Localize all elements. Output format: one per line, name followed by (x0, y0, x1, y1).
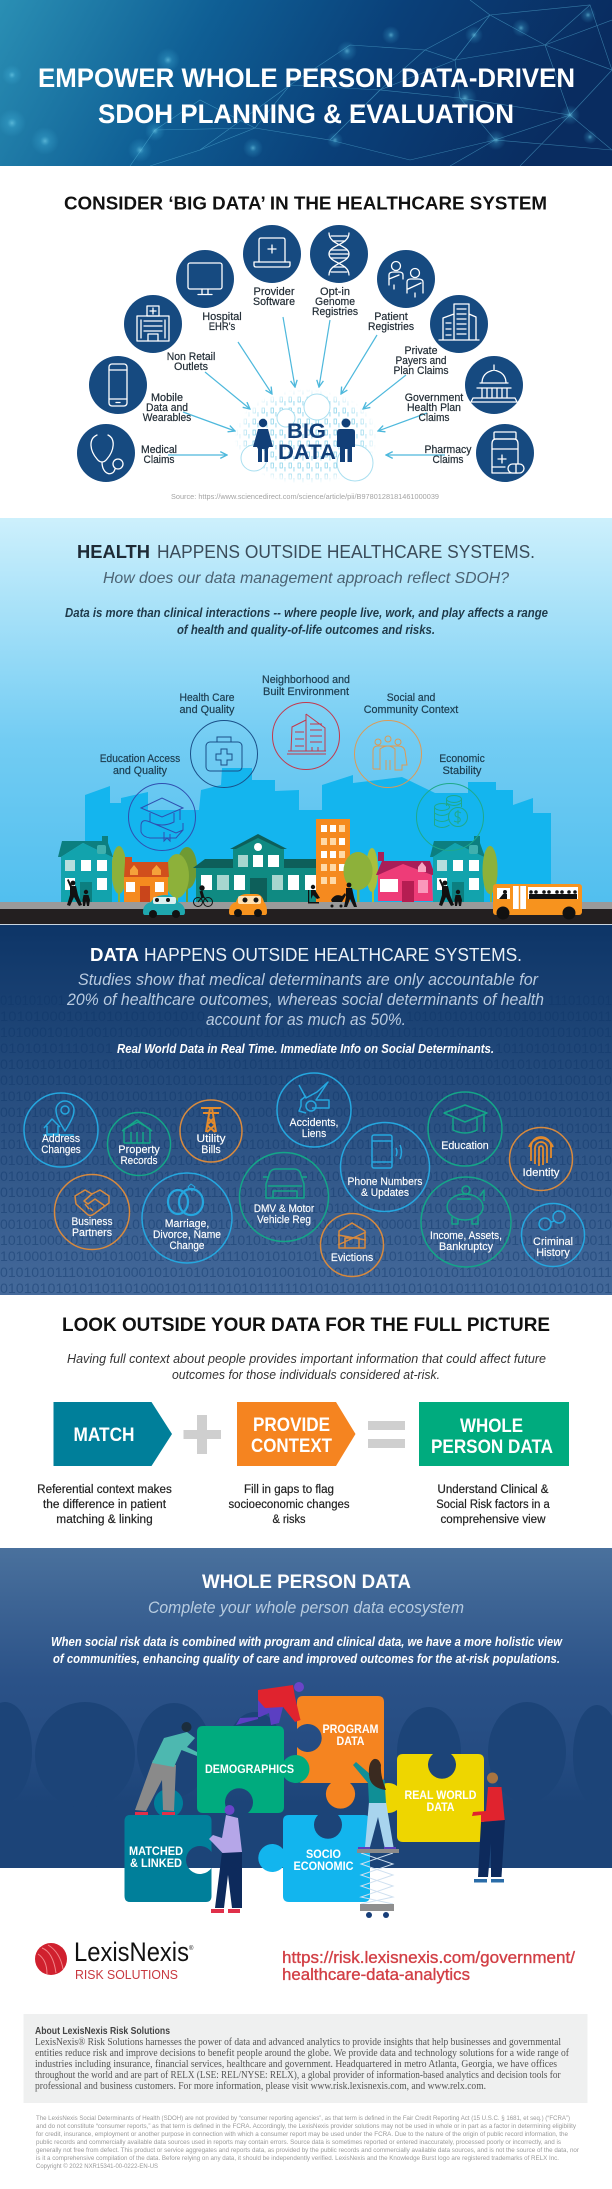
heading: data happens: DATA (90, 944, 139, 965)
about box: industries including insurance, financial services, healthcare and government. Headquartered in metro Atlanta, Georgia, we have offices (35, 2059, 557, 2070)
cyclist (194, 886, 212, 906)
caption: provide context: socioeconomic changes (228, 1499, 350, 1511)
source labels: Mobile (151, 392, 183, 404)
title: EMPOWER WHOLE PERSON DATA-DRIVEN (38, 63, 575, 93)
data source labels: Records (120, 1155, 158, 1167)
source labels: EHR's (209, 321, 236, 333)
icon: office buildings (439, 304, 479, 340)
source circles (77, 225, 534, 482)
source labels: Government (405, 392, 463, 404)
determinant labels: Economic (439, 753, 485, 765)
equals sign (368, 1421, 405, 1448)
determinant labels: Neighborhood and (262, 674, 350, 686)
caption: match: matching & linking (56, 1514, 153, 1526)
panel: header banner (0, 0, 612, 166)
intro text: outcomes for those individuals considered at-risk. (172, 1367, 440, 1382)
data source labels: History (536, 1247, 570, 1259)
heading: look outside: LOOK OUTSIDE YOUR DATA FOR THE FULL PICTURE (62, 1315, 550, 1336)
about box: About LexisNexis Risk Solutions (35, 2025, 170, 2037)
panel: health happens outside healthcare systems (0, 518, 612, 925)
binary background: 0010100010101001000010100100101010010101010000101010100101011010011101010101011 (0, 1104, 612, 1120)
icon: accident cars (299, 1082, 329, 1113)
legal disclaimer: generally not free from defect. This product or service aggregates and reports data, as provided by the public records and commercially available data sources, and is not the source of the data, nor (36, 2147, 580, 2154)
legal disclaimer: public records and commercially available data sources used in reports may contain errors. Source data is sometimes reported or entered inaccurately, processed poorly or incorrectly, and is (36, 2139, 562, 2146)
data source labels: Utility (196, 1133, 226, 1145)
intro text: of health and quality-of-life outcomes and risks. (177, 623, 435, 637)
puzzle piece: real world data: REAL WORLD (404, 1790, 476, 1802)
pink house (376, 852, 435, 902)
intro statistic text (66, 970, 544, 1029)
about box: professional and business customers. For more information, please visit www.risk.lexisnexis.com, and www.relx.com. (35, 2081, 486, 2092)
binary background: 0010100101010010101000010010101010101010100001010000010110101010101011010101010 (0, 1216, 612, 1232)
data source labels: Divorce, Name (153, 1229, 221, 1241)
arrow: provide context: PROVIDE (253, 1415, 330, 1436)
binary background: 0101010111010101000101010101010101010010101001010101010101011010101010101010111 (0, 1264, 612, 1280)
source labels: Provider (254, 286, 295, 298)
logo: LexisNexis Risk Solutions: LexisNexis (74, 1937, 189, 1967)
icon: neighborhood buildings (272, 702, 340, 770)
binary background: 0101010101011011010001010111010101111110101010101110101010101110101010101010101 (0, 1056, 612, 1072)
source labels: Health Plan (407, 402, 461, 414)
binary background: 1010101010101001010010101010101010101010101011010101010101010101010101010010011 (0, 1136, 612, 1152)
icon: smartphone (109, 364, 127, 406)
puzzle piece: demographics: DEMOGRAPHICS (205, 1764, 294, 1776)
puzzle piece: demographics (197, 1726, 309, 1813)
data source labels: Phone Numbers (348, 1176, 423, 1188)
box: whole person data (419, 1402, 569, 1466)
about box: entities reduce risk and improve decisions to benefit people around the globe. We provide data and technology solutions for a wide range of (35, 2048, 570, 2059)
data source labels: Criminal (533, 1236, 573, 1248)
scooter rider (308, 885, 320, 904)
puzzle piece: program data: PROGRAM (322, 1724, 378, 1736)
website link: healthcare-data-analytics (282, 1965, 470, 1984)
binary background (0, 992, 612, 1296)
big data graphic: BIG (287, 420, 326, 443)
icon: economic stability coins (416, 784, 484, 850)
teal car (143, 895, 185, 918)
about box: LexisNexis® Risk Solutions harnesses the power of data and advanced analytics to provide insights that help businesses and governmental (35, 2037, 561, 2048)
determinant labels: and Quality (180, 704, 235, 716)
icon: handcuffs (539, 1211, 565, 1230)
source labels: Medical (141, 444, 177, 456)
subtitle: Complete your whole person data ecosystem (148, 1599, 464, 1617)
source labels: Payers and (396, 355, 446, 367)
orange tower (316, 819, 350, 902)
panel: look outside your data (0, 1295, 612, 1548)
caption: provide context: Fill in gaps to flag (244, 1484, 334, 1496)
caption: match: Referential context makes (37, 1484, 172, 1496)
panel: big data in the healthcare system (64, 166, 546, 500)
binary background: 1010101010101010100111010101010010101010101001010010101010101010101010101010101 (0, 1088, 612, 1104)
source labels: Software (253, 296, 295, 308)
source labels: Claims (418, 412, 450, 424)
determinant labels: Community Context (364, 704, 458, 716)
icon: knowledge burst globe (35, 1943, 67, 1975)
icon: monitor (188, 263, 222, 294)
data source labels (41, 1117, 573, 1264)
icon: man (337, 418, 355, 462)
arrows into big data (168, 317, 445, 455)
icon: fingerprint (529, 1137, 553, 1166)
heading: consider big data: CONSIDER ‘BIG DATA’ IN THE HEALTHCARE SYSTEM (64, 194, 547, 214)
icon: pill bottle (492, 432, 524, 473)
source labels: Registries (312, 306, 358, 318)
puzzle piece: matched and linked: & LINKED (130, 1858, 182, 1870)
road (0, 902, 612, 925)
determinant labels: Education Access (100, 753, 181, 765)
data source labels: Change (170, 1240, 204, 1252)
source labels: Data and (146, 402, 188, 414)
caption: whole person data: Understand Clinical & (438, 1484, 549, 1496)
data source labels: Vehicle Reg (257, 1214, 311, 1226)
arrow: provide context: CONTEXT (251, 1436, 332, 1457)
intro text: of communities, enhancing quality of care and improved outcomes for the at-risk populations. (53, 1652, 560, 1666)
subtitle question: How does our data management approach reflect SDOH? (103, 570, 509, 587)
puzzle piece: socio economic (258, 1815, 370, 1902)
binary background: 101010101001010101001010011 (406, 1008, 612, 1024)
about box: throughout the world and are part of RELX (LSE: REL/NYSE: RELX), a global provider of information-based analytics and decision tools for (35, 2070, 561, 2081)
data source labels: Address (42, 1133, 80, 1145)
determinant labels: Social and (387, 692, 435, 704)
tree over tower (344, 852, 372, 890)
person: teal shirt pushing (135, 1722, 197, 1815)
icon: property house (122, 1120, 152, 1143)
source labels: Opt-in (320, 286, 350, 298)
source labels: Hospital (202, 311, 242, 323)
data source labels: Identity (522, 1167, 560, 1179)
heading: whole person data: WHOLE PERSON DATA (202, 1572, 411, 1593)
title: SDOH PLANNING & EVALUATION (98, 99, 514, 129)
icon: wedding rings (168, 1184, 203, 1215)
panel: whole person data (0, 1548, 612, 1930)
icon: education access (128, 784, 196, 850)
binary background: 0101010101011011010001010111010101111010101010101110101010101110101010101010101 (0, 1168, 612, 1184)
heading: health happens: HEALTH (77, 541, 150, 562)
determinant labels: Built Environment (263, 686, 349, 698)
icon: community people (354, 720, 422, 788)
determinant labels: Stability (442, 765, 482, 777)
intro text (67, 1351, 546, 1382)
puzzle piece: socio economic: ECONOMIC (294, 1861, 354, 1873)
caption: provide context: & risks (272, 1514, 306, 1526)
orange car (229, 894, 267, 917)
determinant labels: and Quality (113, 765, 167, 777)
data source icons (43, 1082, 565, 1248)
person: lilac shirt (209, 1805, 242, 1913)
orange house (124, 857, 169, 902)
source labels: Registries (368, 321, 414, 333)
determinant labels: Health Care (180, 692, 234, 704)
data source labels: Bills (201, 1144, 221, 1156)
intro statistic text: Studies show that medical determinants are only accountable for (78, 970, 539, 989)
icon: piggy bank (447, 1186, 484, 1224)
background crowd silhouettes (0, 1702, 612, 1808)
teal house left (58, 836, 113, 902)
binary background: 010101001 (0, 992, 65, 1008)
binary background: 1010100010111010101010010101111010101010101010101010101010101010101010101010011 (0, 1232, 612, 1248)
data source labels: Business (72, 1216, 113, 1228)
legal disclaimer: and do not constitute “consumer reports,” as that term is defined in the FCRA. Accordingly, the LexisNexis provider solutions may not be used in whole or in part as a factor in determining eligibility (36, 2123, 577, 2130)
arrow: match: MATCH (74, 1425, 134, 1446)
puzzle piece: socio economic: SOCIO (306, 1849, 341, 1861)
source labels: Patient (374, 311, 408, 323)
intro text: Having full context about people provides important information that could affect future (67, 1351, 546, 1366)
logo: LexisNexis Risk Solutions (35, 1937, 194, 1982)
data source circles (24, 1073, 584, 1276)
source labels: Plan Claims (394, 365, 449, 377)
icon: graduation cap (444, 1105, 487, 1133)
source labels: Claims (432, 454, 464, 466)
binary background: 1010001010100101001010101010111010101010101011010101011011010101010101010110011 (0, 1248, 612, 1264)
data source labels: Income, Assets, (430, 1230, 502, 1242)
binary background: 0101010111010101010101010101010101010101001010101001010101010110101010101011010 (0, 1152, 612, 1168)
arrow: provide context (237, 1402, 356, 1466)
intro text: Data is more than clinical interactions -- where people live, work, and play affects a range (65, 606, 548, 620)
caption: match (37, 1484, 172, 1526)
parent with stroller (330, 883, 357, 908)
binary background: 0101010101011011010001010111010101111110101010101110101010101110101010101010101 (0, 1280, 612, 1296)
pedestrians (67, 879, 462, 908)
icon: capitol (471, 365, 517, 402)
data source labels: Property (118, 1144, 160, 1156)
puzzle piece: program data: DATA (336, 1736, 364, 1748)
box: whole person data: WHOLE (460, 1416, 523, 1437)
source labels: Outlets (174, 361, 208, 373)
trees (112, 846, 498, 902)
binary background: 101101010101011 (495, 1040, 612, 1056)
icon: phone with signal (372, 1135, 402, 1168)
box: whole person data: PERSON DATA (431, 1437, 553, 1458)
binary background: 1010001010100101010010001010111010101010101010101011011010101101010101010101001 (0, 1024, 612, 1040)
panel: data happens outside healthcare systems (0, 925, 612, 1296)
binary background: 1010101011011010100101010111010101010101010101010101010101010101010101001010011 (0, 1120, 612, 1136)
data source labels: Marriage, (165, 1218, 209, 1230)
data source labels: & Updates (361, 1187, 409, 1199)
logo: LexisNexis Risk Solutions: RISK SOLUTIONS (75, 1968, 178, 1982)
intro text (51, 1635, 563, 1666)
caption: provide context (228, 1484, 350, 1526)
binary background: 1010100010110101010101010 (0, 1008, 205, 1024)
caption: whole person data: Social Risk factors in a (436, 1499, 550, 1511)
icon: woman (253, 419, 273, 462)
legal disclaimer: is it a comprehensive compilation of the data. Before relying on any data, it should be independently verified. LexisNexis and the Knowledge Burst logo are registered trademarks of RELX Inc. (36, 2155, 559, 2162)
icon: dna helix (329, 233, 349, 275)
person: on scissor lift (353, 1759, 399, 1918)
source labels (141, 286, 472, 466)
legal disclaimer: The LexisNexis Social Determinants of Health (SDOH) are not provided by “consumer reporting agencies”, as that term is defined in the Fair Credit Reporting Act (15 U.S.C. § 1681, et seq.) (“FCRA”) (36, 2115, 570, 2122)
intro statistic text: account for as much as 50%. (206, 1010, 406, 1029)
title (38, 63, 575, 129)
icon: eviction boarded house (338, 1223, 366, 1248)
caption: whole person data: comprehensive view (440, 1514, 546, 1526)
panel: data happens outside healthcare systems: HAPPENS OUTSIDE HEALTHCARE SYSTEMS. (144, 944, 522, 965)
icon: stethoscope (91, 435, 123, 474)
legal disclaimer: for credit, insurance, employment or another purpose in connection with which a consumer report may be used under the FCRA. Due to the nature of the origin of public record information, the (36, 2131, 568, 2138)
source labels: Pharmacy (424, 444, 472, 456)
determinant labels (100, 674, 485, 777)
school building (193, 834, 323, 902)
source labels: Claims (144, 454, 175, 466)
caption: match: the difference in patient (43, 1499, 167, 1511)
source labels: Non Retail (167, 351, 215, 363)
source labels: Genome (315, 296, 355, 308)
data source labels: Accidents, (290, 1117, 338, 1129)
icon: health care kit (190, 720, 258, 788)
tagline: Real World Data in Real Time. Immediate Info on Social Determinants. (117, 1042, 494, 1056)
data source labels: DMV & Motor (254, 1203, 315, 1215)
logo: LexisNexis Risk Solutions: ® (189, 1945, 194, 1952)
legal disclaimer (36, 2115, 580, 2170)
panel: footer (24, 1937, 588, 2170)
puzzle piece: matched and linked (124, 1789, 212, 1902)
intro text (65, 606, 548, 637)
icon: hospital (137, 306, 169, 341)
data source labels: Partners (72, 1227, 112, 1239)
big data graphic: DATA (278, 441, 336, 464)
website link (282, 1948, 575, 1984)
icon: car front (263, 1169, 307, 1198)
website link: https://risk.lexisnexis.com/government/ (282, 1948, 575, 1967)
icon: handshake (75, 1190, 109, 1216)
data source labels: Bankruptcy (439, 1241, 493, 1253)
data source labels: Education (441, 1140, 489, 1152)
icon: laptop (254, 238, 290, 267)
intro statistic text: 20% of healthcare outcomes, whereas social determinants of health (66, 990, 544, 1009)
city skyline (85, 768, 551, 910)
determinant circles and icons (128, 702, 484, 850)
caption: whole person data (436, 1484, 550, 1526)
puzzle piece: matched and linked: MATCHED (129, 1846, 183, 1858)
puzzle piece: real world data (373, 1754, 484, 1842)
icon: patients (389, 262, 423, 297)
person: red shirt standing (472, 1772, 505, 1882)
arrow: match (54, 1402, 172, 1466)
binary background: 0101010101010101010101010101111110101000011010101010010101101010101001011001010 (0, 1072, 612, 1088)
data source labels: Changes (41, 1144, 81, 1156)
binary background: 01010101110101 (0, 1040, 113, 1056)
panel: health happens outside healthcare systems: HAPPENS OUTSIDE HEALTHCARE SYSTEMS. (157, 541, 535, 562)
plus sign (184, 1415, 221, 1454)
icon: address pin (43, 1101, 74, 1135)
teal house right (430, 836, 485, 902)
data source labels: Liens (302, 1128, 327, 1140)
person: crawling on top (236, 1682, 304, 1725)
school bus (493, 884, 582, 920)
puzzle piece: program data (297, 1696, 384, 1809)
source citation: Source: https://www.sciencedirect.com/science/article/pii/B9780128181461000039 (171, 494, 439, 501)
binary background: 1010101010101010100101010101010100101010100101010101010101010101010101010101011 (0, 1200, 612, 1216)
source labels: Wearables (143, 412, 192, 424)
intro text: When social risk data is combined with program and clinical data, we have a more holistic view (51, 1635, 563, 1649)
big data graphic (236, 390, 376, 482)
tree right of house (482, 846, 498, 894)
legal disclaimer: Copyright © 2022 NXR15341-00-0222-EN-US (36, 2162, 158, 2170)
about box (24, 2014, 588, 2103)
data source labels: Evictions (331, 1252, 374, 1264)
binary background: 0101010101010101010101010111111010101111100101010010101010101010100101010010110 (0, 1184, 612, 1200)
icon: utility tower (201, 1108, 221, 1132)
source labels: Private (404, 345, 438, 357)
puzzle piece: real world data: DATA (426, 1802, 454, 1814)
